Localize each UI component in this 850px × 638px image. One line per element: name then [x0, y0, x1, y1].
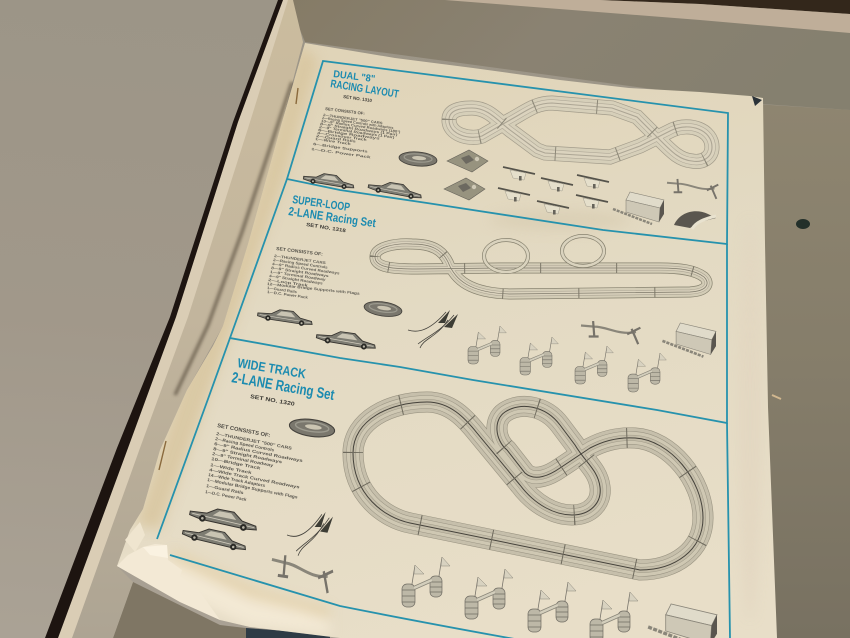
heading: 2-Lane Racing Set: 2-LANE Racing Set	[230, 369, 336, 404]
car	[257, 307, 313, 327]
instruction sheet	[117, 43, 777, 638]
panel: Super-Loop set	[230, 179, 727, 423]
power pack	[648, 604, 717, 638]
bridge pier	[447, 150, 488, 172]
parts list: 4—Crossover Track	[317, 131, 367, 142]
bridge support	[503, 167, 535, 180]
flag support pair	[528, 582, 576, 632]
curved track stack	[674, 211, 716, 229]
parts list: 2—9" Terminal Roadways (1 Pair)	[319, 125, 395, 140]
super-loop track	[375, 236, 707, 294]
hand controller	[581, 321, 640, 344]
parts list: 2—Racing Speed Controls	[273, 258, 328, 270]
speed controllers	[408, 310, 458, 348]
parts list	[205, 423, 304, 502]
parts list: 1—Guard Rails	[206, 483, 245, 495]
bridge support	[541, 178, 573, 192]
power pack	[613, 192, 664, 224]
parts list: 6—Bridge Roadways	[318, 128, 380, 141]
parts list: 8—9" Straight Roadways	[271, 266, 329, 278]
bridge support	[537, 201, 569, 214]
right floor spot	[796, 219, 810, 229]
flag support pair	[402, 557, 450, 607]
panel 2 frame	[230, 179, 727, 423]
parts list: 4—9" Straight Roadways	[269, 274, 323, 286]
parts list: 14—Wide Track Adaptors	[208, 472, 266, 488]
parts list: 8—9" Straight Roadways	[213, 446, 283, 465]
set number 1310: SET NO. 1310	[343, 94, 373, 103]
parts list: 1—Modular Bridge Supports with Flags	[207, 477, 299, 500]
parts list: SET CONSISTS OF:	[217, 423, 271, 439]
box: bottom floor	[113, 582, 330, 638]
parts list: SET CONSISTS OF:	[325, 106, 365, 116]
parts list: 1—D.C. Power Pack	[311, 147, 371, 159]
power pack	[662, 323, 716, 357]
parts list	[311, 106, 401, 159]
scrap under sheet	[246, 628, 330, 638]
coil of wire	[363, 299, 403, 319]
heading: Racing Layout: RACING LAYOUT	[330, 78, 400, 101]
car	[189, 504, 259, 533]
black corner tab	[752, 96, 762, 106]
parts list: 1—Wire Track	[315, 137, 351, 146]
parts list: 2—THUNDERJET CARS	[274, 254, 327, 265]
bridge support	[577, 175, 609, 188]
crumpled corner	[117, 522, 220, 620]
parts list: 10—9" Radius Curved Roadways (180°)	[321, 119, 401, 134]
coil of wire	[288, 417, 336, 439]
set number 1320: SET NO. 1320	[250, 394, 295, 408]
bridge pier	[444, 178, 485, 200]
heading: Dual 8: DUAL "8"	[333, 69, 376, 85]
flag support pair	[628, 353, 666, 392]
parts list	[267, 246, 360, 300]
parts list: 6—Bridge Supports	[313, 142, 368, 154]
parts list: 1—D.C. Power Pack	[205, 489, 248, 502]
parts list: 1—Guard Rails	[267, 286, 297, 294]
parts list: 2—9" Terminal Roadway	[212, 451, 274, 468]
parts list: 6—9" Radius Curved Roadways	[214, 441, 304, 463]
bridge support	[576, 195, 608, 208]
paper stains	[134, 48, 615, 636]
coil of wire	[398, 150, 438, 168]
parts list: 8—9" Straight Roadways (1 Pair)	[320, 122, 398, 137]
bridge support	[498, 188, 530, 202]
flag support pair	[590, 592, 638, 638]
parts list: 2—THUNDERJET "500" CARS	[216, 431, 293, 451]
flag support pair	[468, 326, 506, 364]
parts list: 2—Loop Track	[268, 278, 309, 288]
parts list: 4—9" Radius Curved Roadways	[272, 262, 340, 275]
parts list: 2—THUNDERJET "500" CARS	[323, 113, 384, 125]
parts list: 1—9" Terminal Roadway	[270, 270, 327, 282]
heading: Super-Loop: SUPER-LOOP	[292, 194, 351, 214]
parts list: 1—Wide Track	[210, 462, 253, 475]
heading: 2-Lane Racing Set: 2-LANE Racing Set	[288, 204, 377, 230]
parts list: SET CONSISTS OF:	[276, 246, 324, 257]
sheet paper	[117, 43, 777, 638]
panel: Dual 8 racing layout	[287, 61, 728, 244]
parts list: 2—Guard Rails	[316, 134, 356, 144]
panel: Wide Track set	[157, 338, 730, 638]
car	[316, 328, 377, 351]
box: far wall	[288, 0, 850, 638]
flag support pair	[465, 569, 513, 619]
parts list: 2—Racing Speed Controls with Adaptors	[322, 116, 394, 130]
wide track circuit	[353, 402, 703, 570]
flag support pair	[520, 337, 558, 375]
car	[303, 171, 355, 190]
speed controllers	[287, 512, 333, 556]
panel 1 frame	[287, 61, 728, 244]
car	[367, 179, 423, 201]
parts list: 4—Wide Track Curved Roadways	[209, 467, 301, 490]
staple marks	[159, 88, 298, 470]
car	[181, 524, 248, 553]
parts list: 10—Bridge Track	[211, 456, 262, 471]
set number 1318: SET NO. 1318	[306, 222, 346, 234]
heading: Wide Track: WIDE TRACK	[237, 355, 308, 381]
parts list: 1—D.C. Power Pack	[267, 290, 309, 300]
hand controller	[667, 179, 718, 199]
parts list: 2—Racing Speed Controls	[215, 436, 275, 453]
parts list: 12—Modular Bridge Supports with Flags	[267, 282, 360, 296]
panel 3 frame	[157, 338, 730, 638]
hand controller	[268, 553, 334, 593]
figure-8 track	[449, 103, 712, 161]
flag support pair	[575, 346, 613, 384]
box: left wall	[45, 0, 303, 638]
